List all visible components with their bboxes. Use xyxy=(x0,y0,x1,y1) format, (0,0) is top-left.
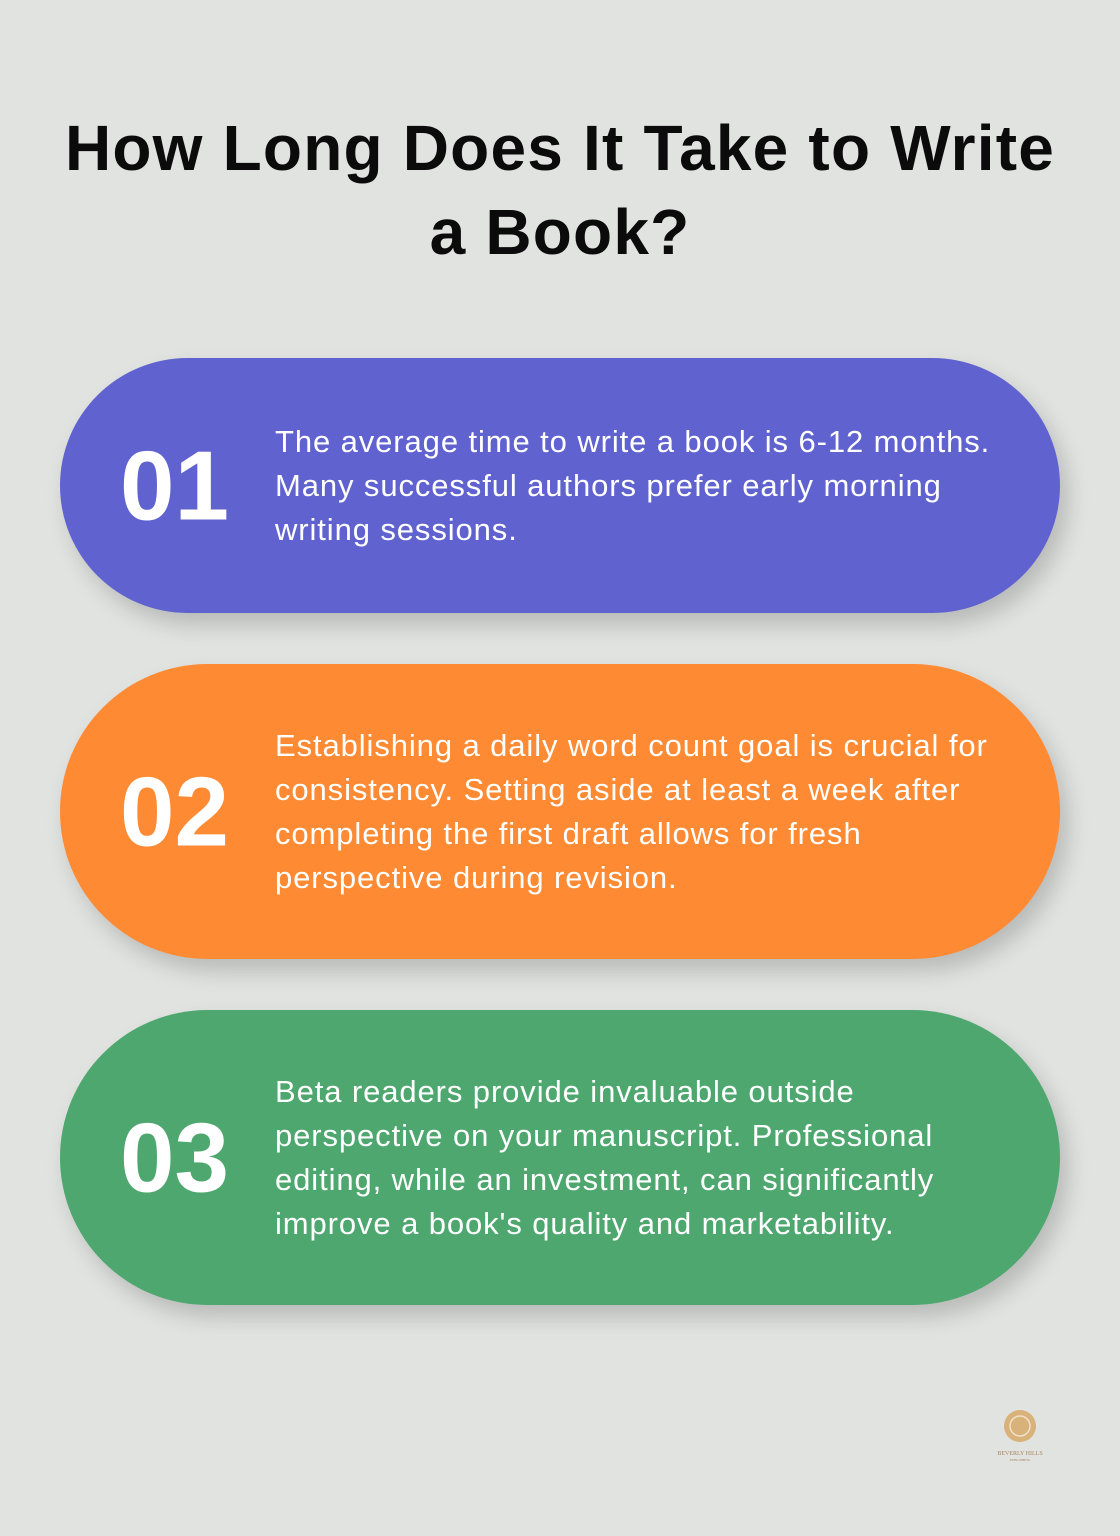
text: step 02: consistency. Setting aside at least a week after xyxy=(275,772,960,806)
logo: PUBLISHING xyxy=(1010,1458,1031,1462)
text: step 03: editing, while an investment, can significantly xyxy=(275,1162,934,1196)
number 03: 03 xyxy=(120,1102,229,1212)
text: step 03: Beta readers provide invaluable outside xyxy=(275,1074,855,1108)
panel: step 03 xyxy=(60,1010,1060,1305)
text: step 03: improve a book's quality and marketability. xyxy=(275,1206,895,1240)
panel: step 01 xyxy=(60,358,1060,613)
text: step 03 xyxy=(275,1074,934,1240)
text: step 02: Establishing a daily word count goal is crucial for xyxy=(275,728,988,762)
number 02: 02 xyxy=(120,756,229,866)
text: step 01: writing sessions. xyxy=(275,512,518,546)
panel: step 02 xyxy=(60,664,1060,959)
logo xyxy=(997,1410,1043,1462)
text: step 01 xyxy=(275,424,990,546)
text: step 02 xyxy=(275,728,988,894)
logo: BEVERLY HILLS xyxy=(997,1451,1043,1457)
text: step 03: perspective on your manuscript. Professional xyxy=(275,1118,933,1152)
text: step 01: The average time to write a book is 6-12 months. xyxy=(275,424,990,458)
title: How Long Does It Take to Write xyxy=(65,112,1055,184)
title: a Book? xyxy=(430,196,690,268)
text: step 02: perspective during revision. xyxy=(275,860,678,894)
number 01: 01 xyxy=(120,430,229,540)
text: step 02: completing the first draft allows for fresh xyxy=(275,816,862,850)
title xyxy=(65,112,1055,268)
text: step 01: Many successful authors prefer early morning xyxy=(275,468,942,502)
